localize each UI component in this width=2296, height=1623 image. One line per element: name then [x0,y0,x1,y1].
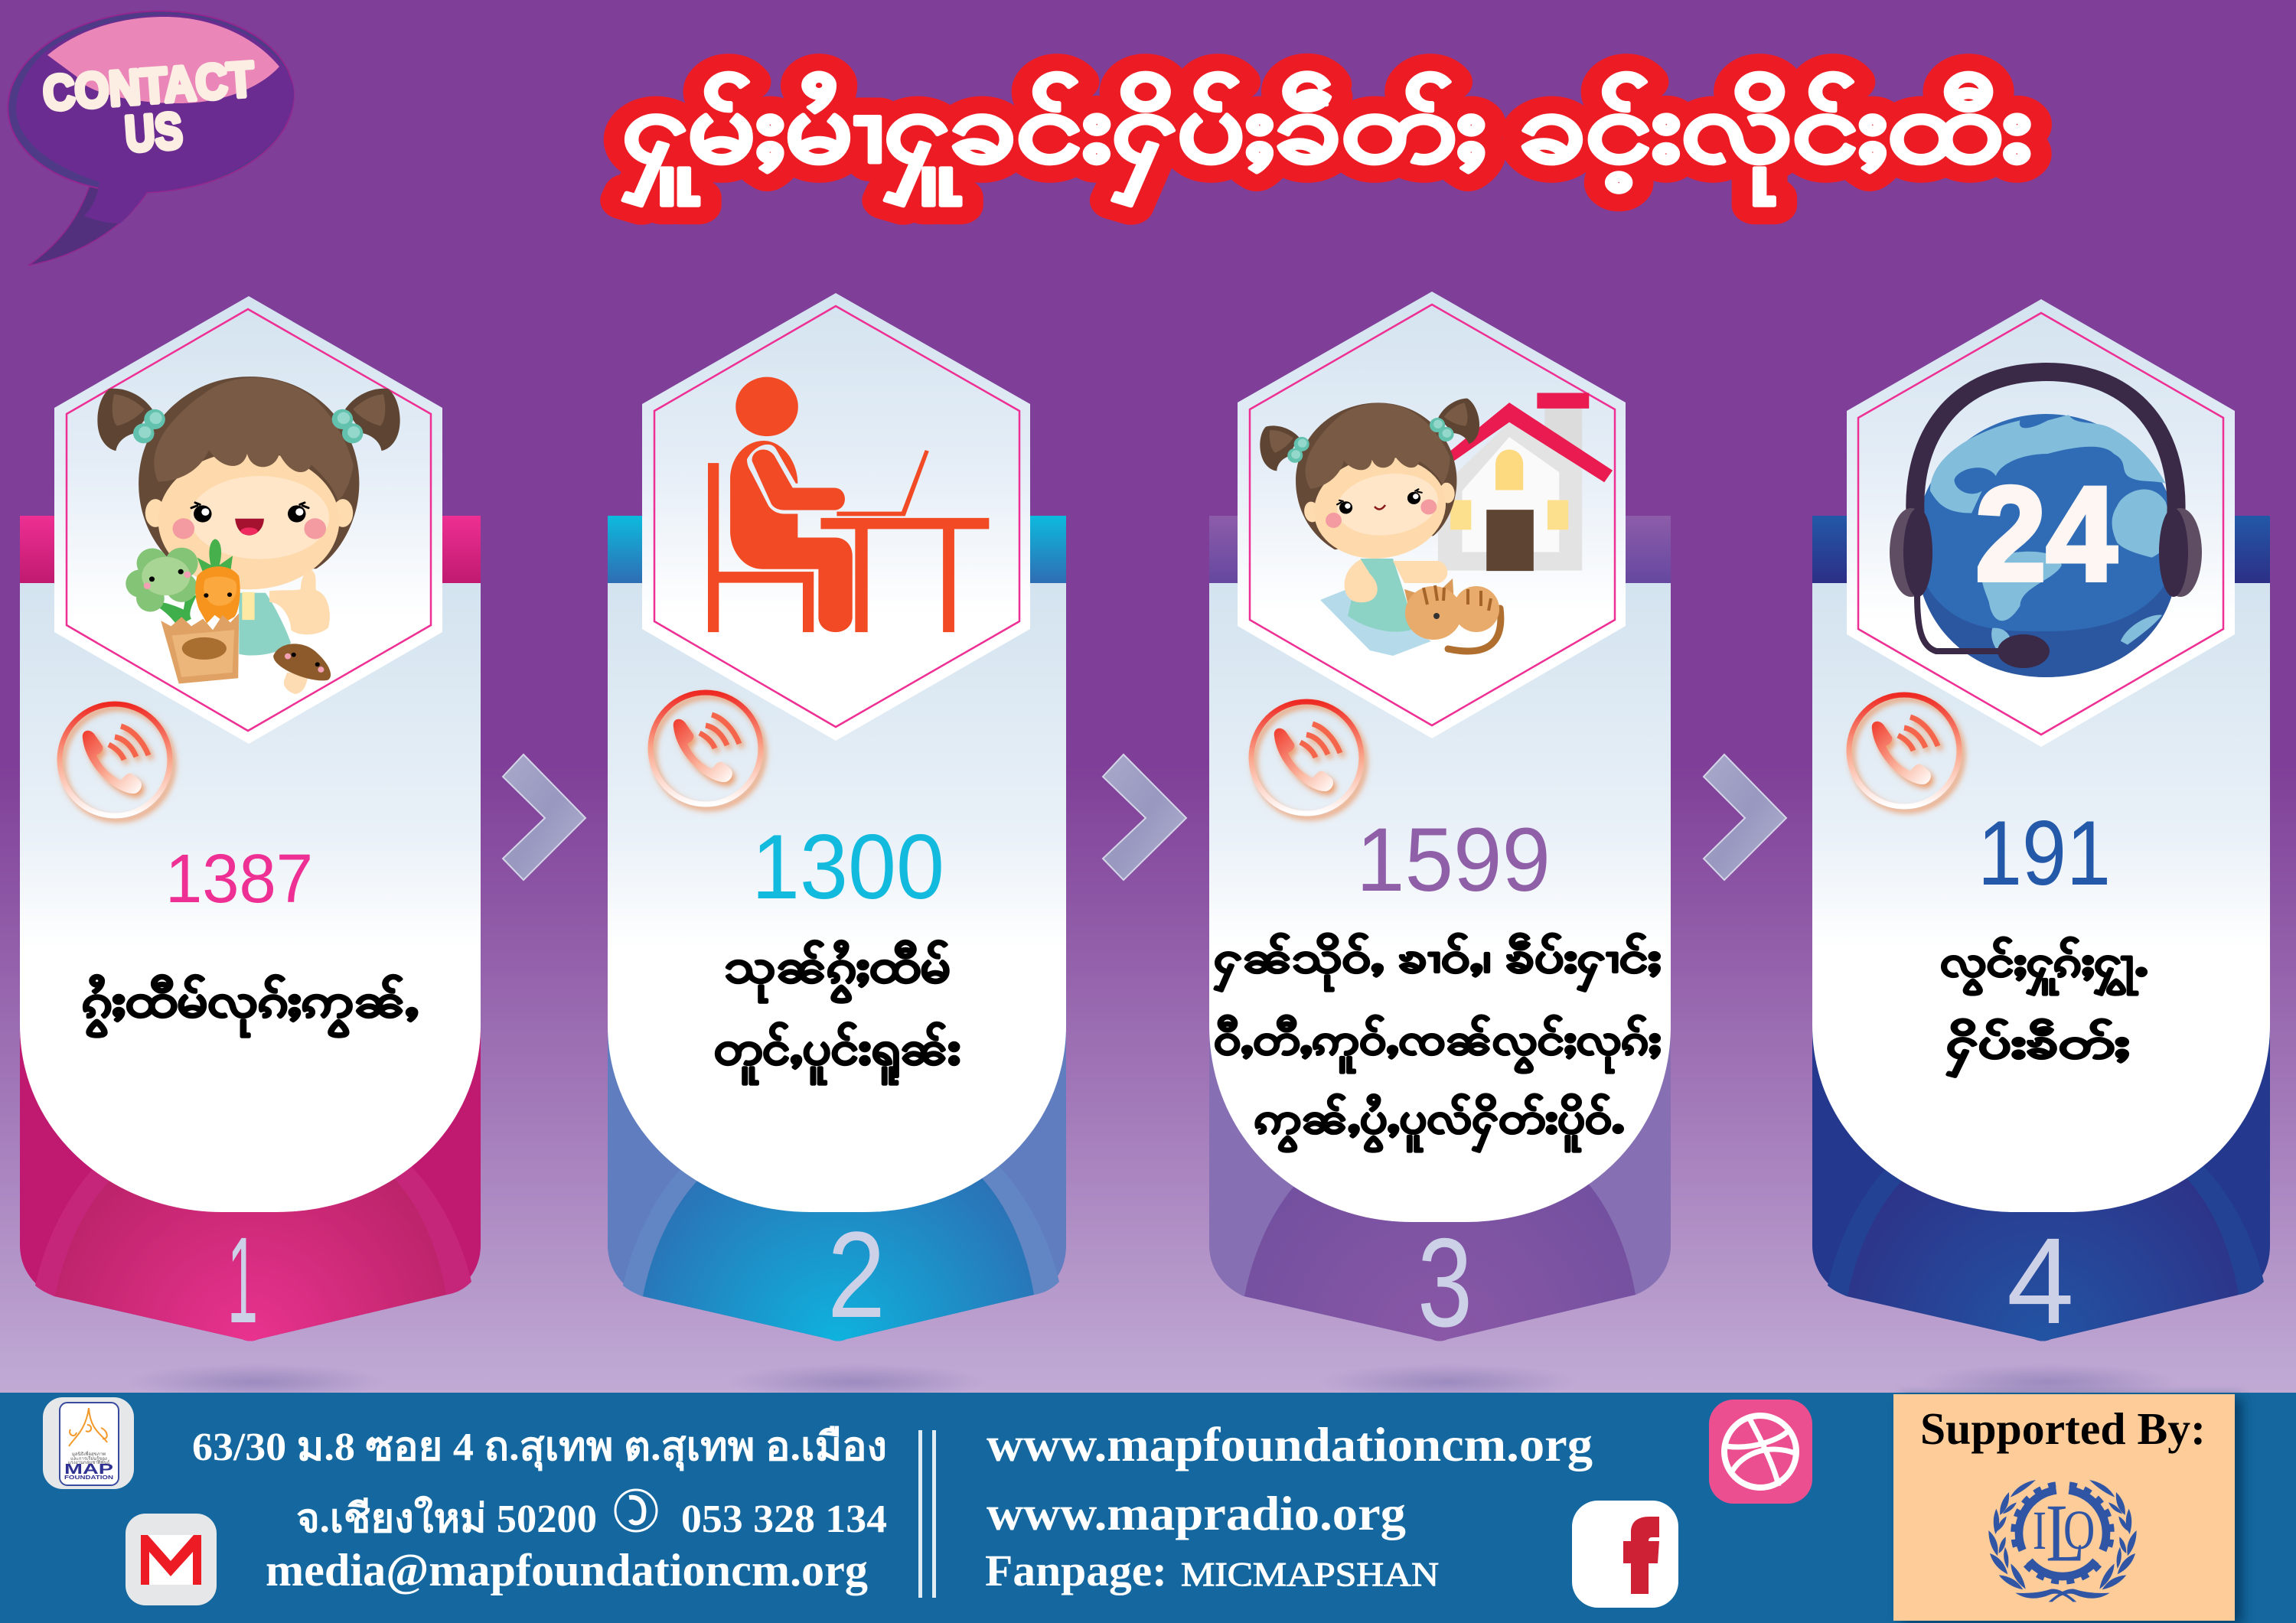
dress [1348,559,1414,632]
white panel [1812,583,2270,1212]
collar [242,592,255,620]
top band [608,516,1066,583]
speech bubble: contact us [2,2,300,266]
service name [714,940,960,1084]
mushroom [273,644,331,694]
ribbon base [608,583,1066,1341]
arm [752,449,845,510]
table [820,518,989,632]
fanpage label: Fanpage: [985,1546,1167,1595]
title [622,71,2032,206]
hexagon frame 3 [1238,292,1626,738]
service name: တူင်ႇပူင်းရူၼ်း [714,1022,960,1084]
phone icon card 2 [651,693,761,804]
panel: supported by [1893,1394,2235,1621]
phone number: 1300 [752,816,944,918]
top band [1209,516,1671,583]
panel: card 4 [1812,516,2270,1349]
email: media@mapfoundationcm.org [266,1545,868,1595]
bubble highlight [47,17,279,103]
icon: gmail [126,1514,217,1605]
arrow 3 [1704,754,1786,880]
logo: MAP foundation [43,1397,134,1489]
panel: card 1 [20,516,481,1348]
icon: facebook [1572,1501,1678,1608]
logo mark [69,1408,107,1446]
broccoli [126,548,198,626]
website 2: www.mapradio.org [987,1486,1406,1540]
headset band [1915,372,2177,520]
icon: telephone circle [615,1490,657,1531]
phone number: 1387 [165,841,313,917]
service name: ဢွၼ်ႇပွႆႇပူလ်ႁိတ်းပိူဝ်ႉ [1254,1093,1624,1152]
heading: Supported By: [1920,1403,2206,1454]
ribbon base [1812,583,2270,1341]
ribbon base [1209,583,1671,1341]
panel: card 2 [608,516,1066,1343]
letter I: I [2033,1501,2047,1561]
ribbon mid arc [35,1140,471,1341]
phone icon card 4 [1849,695,1959,807]
girl head [1256,389,1496,573]
service name: ႁၼ်သိုဝ်ႇ ၶၢဝ်ႇ၊ ၶဵပ်းႁၢင်ႈ [1214,933,1661,992]
step number: 3 [1417,1212,1473,1353]
top band [20,516,481,583]
smile [1375,505,1385,510]
mouth [235,519,264,536]
bubble face [16,15,294,223]
title: ႁူမ်ႈမၢႆႁူခင်းႁိပ်ႈခဵတ်ႈ ခင့်းလိုင်ႈထီး [622,71,2032,206]
service name: လွင်ႈႁူၵ်ႈႁွႃႉ [1940,937,2148,996]
panel: card 3 [1209,516,1671,1353]
ribbon dome [55,1152,446,1341]
website 1: www.mapfoundationcm.org [987,1417,1593,1471]
white panel [608,583,1066,1212]
service name: သုၼ်ၵွႆႈထီမ် [725,940,951,1002]
gear [2014,1484,2112,1582]
letter O: O [2063,1499,2095,1561]
service name: ၵွႆႈထီမ်လုၵ်ႈဢွၼ်ႇ [82,974,419,1037]
icon: person at laptop [708,377,989,632]
paper bag [161,613,239,683]
ribbon mid arc [623,1140,1059,1341]
house [1438,393,1613,571]
address line 2: จ.เชียงใหม่ 50200 [296,1495,597,1541]
earcups [1890,508,2202,597]
continents [1930,415,2172,658]
logo text: แรงงานกลุ่มชาติพันธุ์ [68,1459,110,1465]
logo text: FOUNDATION [64,1475,113,1481]
hexagon frame 2 [642,293,1030,741]
number 24: 24 [1975,460,2117,609]
service name [1214,933,1661,1152]
step number: 4 [2007,1212,2074,1349]
ribbon dome [1848,1152,2239,1341]
title: ႁူမ်ႈမၢႆႁူခင်းႁိပ်ႈခဵတ်ႈ ခင့်းလိုင်ႈထီး [622,71,2032,206]
logo text [64,1451,113,1481]
head [735,377,798,436]
hexagon frame 4 [1847,299,2235,747]
icon: 24 hour globe with headset [1890,372,2202,677]
service name [1940,937,2148,1077]
left laurel [1988,1480,2076,1602]
icon: dribbble [1709,1400,1812,1504]
torso and leg [730,441,853,632]
box [1893,1394,2235,1621]
bubble body [2,2,300,202]
panel: card 1: 1 [227,1211,258,1348]
hexagon frame 1 [54,296,442,744]
logo text: MAP [64,1462,113,1477]
globe [1915,414,2178,677]
globe shadow [1916,559,2177,677]
logo: ILO [1988,1480,2137,1602]
icon: girl at home with cat [1256,389,1613,656]
top band [1812,516,2270,583]
phone number: 1599 [1356,810,1551,911]
ribbon dome [1244,1152,1636,1341]
logo text: มูลนิธิเพื่อสุขภาพ [72,1451,106,1457]
letter L: L [2046,1487,2085,1579]
fanpage name: MICMAPSHAN [1181,1556,1439,1593]
thumbs up hand [269,570,330,634]
phone number: 191 [1978,802,2111,904]
chair [708,463,814,632]
logo text: และการเรียนรู้ของ [70,1455,107,1462]
step number: 2 [827,1206,885,1343]
card shadows [126,1364,2179,1400]
carrot [195,539,240,623]
white panel [1209,583,1671,1222]
us text: US [123,102,184,162]
pillow [1320,589,1431,656]
ribbon mid arc [1828,1140,2264,1341]
microphone [1917,595,2050,668]
girl dress [239,593,291,656]
icon: girl with vegetables [97,376,400,694]
arms [1345,559,1447,602]
bubble tail [28,186,147,266]
arrow 2 [1103,754,1186,880]
white panel [20,583,481,1212]
ribbon dome [643,1152,1034,1341]
right laurel [2049,1480,2137,1602]
laptop [837,450,929,516]
divider [918,1430,936,1598]
arrow 1 [503,754,585,880]
service name: ဝီႇတီႇဢူဝ်ႇၸၼ်လွင်ႈလုၵ်ႈ [1214,1015,1661,1073]
address line 1: 63/30 ม.8 ซอย 4 ถ.สุเทพ ต.สุเทพ อ.เมือง [192,1426,887,1471]
phone icon card 3 [1251,702,1362,813]
phone number footer: 053 328 134 [681,1498,887,1541]
ribbon base [20,583,481,1341]
phone icon card 1 [60,704,170,816]
cat [1404,578,1501,651]
contact text: CONTACT [41,51,256,121]
girl head [97,376,400,589]
footer band [0,1393,2296,1623]
service name: ႁိပ်းၶဵတ်ႈ [1946,1018,2129,1077]
